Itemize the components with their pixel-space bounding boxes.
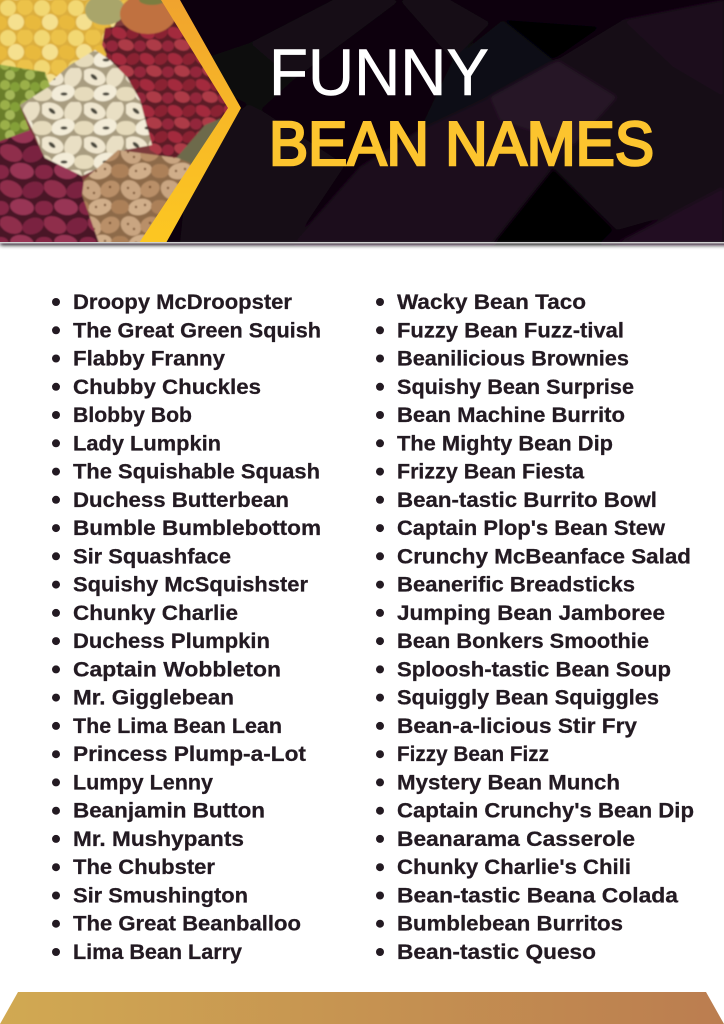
item: Bean-tastic Burrito Bowl: [397, 489, 657, 512]
item: Chunky Charlie's Chili: [397, 856, 631, 879]
item: Beanilicious Brownies: [397, 348, 629, 370]
item: Lady Lumpkin: [73, 432, 221, 455]
item: Squishy McSquishster: [73, 574, 308, 597]
item: The Chubster: [73, 856, 215, 879]
bean photo hexagon: [0, 0, 237, 247]
item: Bumble Bumblebottom: [73, 517, 321, 540]
item: Bean-a-licious Stir Fry: [397, 715, 637, 738]
item: Beanjamin Button: [73, 800, 265, 823]
item: Frizzy Bean Fiesta: [397, 461, 584, 484]
item: Duchess Butterbean: [73, 489, 289, 512]
maroon kidney beans: [0, 130, 105, 246]
item: Droopy McDroopster: [73, 291, 292, 314]
item: Bean-tastic Beana Colada: [397, 884, 678, 908]
item: Beanarama Casserole: [397, 828, 635, 851]
green and orange seed discs: [85, 0, 176, 34]
item: Mystery Bean Munch: [397, 771, 620, 794]
header banner: [0, 0, 724, 247]
item: Squishy Bean Surprise: [397, 376, 634, 399]
pinto beans: [82, 150, 195, 246]
yellow split peas: [0, 0, 130, 84]
white black-eyed peas: [20, 50, 152, 177]
item: Bean Bonkers Smoothie: [397, 630, 649, 653]
item: Beanerific Breadsticks: [397, 574, 635, 597]
item: Crunchy McBeanface Salad: [397, 545, 691, 568]
item: Blobby Bob: [73, 404, 192, 427]
item: Bean-tastic Queso: [397, 941, 596, 964]
gold chevron: [139, 0, 241, 243]
item: Mr. Mushypants: [73, 828, 244, 851]
item: Captain Crunchy's Bean Dip: [397, 800, 694, 823]
item: Wacky Bean Taco: [397, 291, 586, 314]
item: Squiggly Bean Squiggles: [397, 687, 659, 710]
title: FUNNY: FUNNY: [269, 35, 489, 109]
item: Fizzy Bean Fizz: [397, 743, 549, 766]
item: Lumpy Lenny: [73, 771, 213, 794]
item: Captain Plop's Bean Stew: [397, 517, 666, 540]
item: Fuzzy Bean Fuzz-tival: [397, 319, 624, 342]
lentil strip along chevron: [176, 118, 222, 164]
item: The Great Green Squish: [73, 319, 321, 342]
item: Chunky Charlie: [73, 602, 238, 625]
item: Princess Plump-a-Lot: [73, 743, 306, 766]
red adzuki beans: [101, 22, 228, 158]
list column 2: [376, 291, 694, 964]
item: Chubby Chuckles: [73, 376, 261, 399]
item: The Mighty Bean Dip: [397, 432, 613, 455]
item: Captain Wobbleton: [73, 658, 281, 681]
item: Flabby Franny: [73, 348, 225, 370]
footer gold band: [0, 992, 724, 1024]
item: Sir Squashface: [73, 545, 231, 568]
item: Duchess Plumpkin: [73, 630, 270, 653]
item: The Lima Bean Lean: [73, 715, 282, 738]
list column 1: [52, 291, 321, 964]
item: Sir Smushington: [73, 884, 248, 908]
dark geometric background: [0, 0, 724, 245]
item: Mr. Gigglebean: [73, 687, 234, 710]
title: BEAN NAMES: BEAN NAMES: [269, 110, 654, 179]
item: The Great Beanballoo: [73, 913, 301, 936]
green mung beans: [0, 64, 50, 142]
item: Bean Machine Burrito: [397, 404, 625, 427]
item: Jumping Bean Jamboree: [397, 602, 665, 625]
item: Bumblebean Burritos: [397, 913, 623, 936]
item: Lima Bean Larry: [73, 941, 242, 964]
item: Sploosh-tastic Bean Soup: [397, 658, 671, 681]
item: The Squishable Squash: [73, 461, 320, 484]
